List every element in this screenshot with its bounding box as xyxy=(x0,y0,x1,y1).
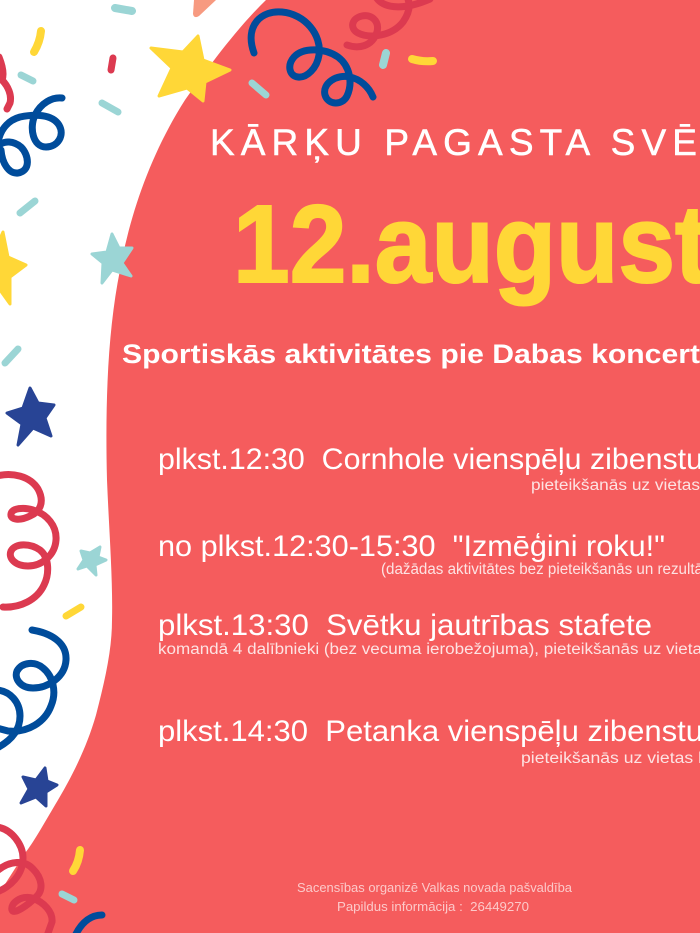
star: teal small xyxy=(78,547,106,575)
orange party hat tip xyxy=(193,0,216,17)
event note 3: komandā 4 dalībnieki (bez vecuma ierobežojuma), pieteikšanās uz vieta xyxy=(158,641,700,658)
swirl: red small left xyxy=(0,57,11,109)
organiser line: Sacensības organizē Valkas novada pašvaldība xyxy=(297,880,573,895)
contact line: Papildus informācija : 26449270 xyxy=(337,899,529,914)
event title 4: plkst.14:30 Petanka vienspēļu zibenstu xyxy=(158,715,700,748)
confetti dashes xyxy=(5,8,433,900)
title: KĀRĶU PAGASTA SVĒ xyxy=(210,122,700,163)
event title 2: no plkst.12:30-15:30 "Izmēģini roku!" xyxy=(158,530,665,563)
star: navy small xyxy=(21,768,57,806)
subtitle: Sportiskās aktivitātes pie Dabas koncert xyxy=(122,339,700,369)
swirl: blue left loop xyxy=(0,142,27,173)
swirl: red bottom xyxy=(0,827,23,892)
swirl: red middle xyxy=(0,475,56,607)
schedule item 2 xyxy=(158,530,700,578)
swirl: red bottom loop xyxy=(0,862,52,933)
event title 3: plkst.13:30 Svētku jautrības stafete xyxy=(158,609,652,642)
swirl: blue lower xyxy=(0,630,66,731)
footer organiser xyxy=(297,880,573,914)
swirl: red top second xyxy=(376,0,430,7)
swirl: blue bottom xyxy=(75,915,102,933)
event note 1: pieteikšanās uz vietas xyxy=(531,477,700,494)
swirl: blue top xyxy=(251,12,373,103)
swirl: red top xyxy=(347,0,409,47)
star: teal top xyxy=(92,234,132,283)
star: navy xyxy=(7,388,54,445)
star: yellow left xyxy=(0,232,26,304)
event title 1: plkst.12:30 Cornhole vienspēļu zibenstu xyxy=(158,443,700,476)
swirl: blue lower loop xyxy=(0,690,20,748)
star: yellow top xyxy=(151,36,230,101)
schedule item 1 xyxy=(158,443,700,494)
event note 4: pieteikšanās uz vietas l xyxy=(521,750,700,767)
swirl: blue left top xyxy=(0,98,62,147)
schedule item 4 xyxy=(158,715,700,767)
schedule item 3 xyxy=(158,609,700,658)
